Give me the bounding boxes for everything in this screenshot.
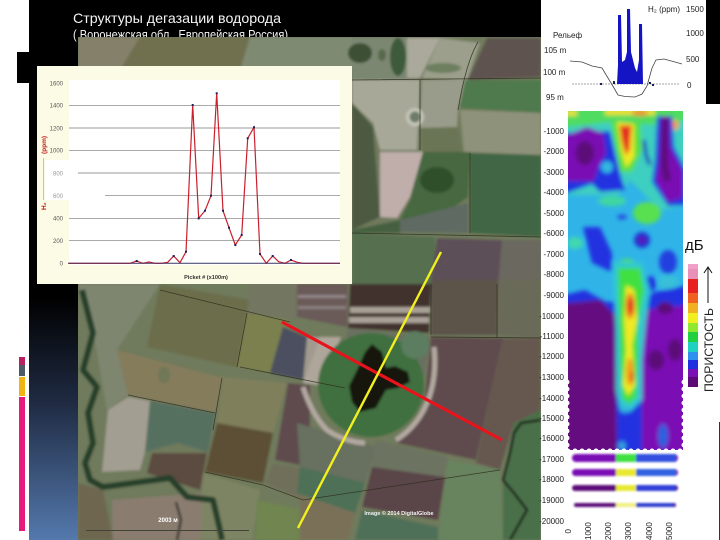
lake green ground: [318, 333, 424, 437]
arrow: porosity up: [704, 267, 712, 303]
chart y axis labels: 800: [53, 172, 64, 178]
elevation labels: [543, 46, 567, 102]
chart y axis title: [41, 136, 48, 210]
panel: relief and hydrogen bars: [541, 0, 706, 104]
middle: [598, 196, 626, 206]
depth axis labels: -15000: [539, 414, 565, 423]
depth axis labels: -2000: [544, 147, 565, 156]
chart x axis title: Picket # (x100m): [184, 275, 228, 281]
depth axis labels: [539, 127, 565, 526]
distance axis labels: 0: [564, 528, 573, 533]
hydrogen axis labels: 0: [687, 81, 692, 90]
distance axis labels: 3000: [624, 522, 633, 540]
relief label: Рельеф: [553, 31, 582, 40]
heatmap: [568, 111, 683, 450]
distance axis labels: 1000: [584, 522, 593, 540]
dark markers: [600, 81, 654, 86]
distance axis labels: 2000: [604, 522, 613, 540]
upper right fields: [352, 38, 407, 80]
depth axis labels: -6000: [544, 229, 565, 238]
depth axis labels: -11000: [540, 332, 565, 341]
upper layers: [568, 111, 683, 130]
depth axis labels: -18000: [539, 475, 565, 484]
satellite map: [76, 35, 546, 540]
upper-left purple: [562, 127, 606, 181]
right plume: [652, 116, 686, 206]
red profile line: [282, 322, 502, 440]
hydrogen axis labels: 1000: [686, 29, 704, 38]
depth axis labels: -7000: [544, 250, 565, 259]
depth axis labels: -8000: [544, 270, 565, 279]
left marker strip: [17, 52, 29, 531]
chart y axis labels: 400: [53, 216, 64, 222]
depth axis labels: -16000: [539, 434, 565, 443]
chart y axis labels: 1200: [50, 126, 64, 132]
depth axis labels: -9000: [544, 291, 565, 300]
elevation labels: 95 m: [546, 93, 564, 102]
chart y axis labels: [50, 82, 64, 268]
yellow profile line: [298, 252, 441, 528]
chart y axis labels: 200: [53, 239, 64, 245]
elevation labels: 100 m: [543, 68, 566, 77]
depth axis labels: -1000: [544, 127, 565, 136]
dark lake: [349, 344, 410, 412]
chart erased patch: [45, 160, 70, 200]
chart y axis title: (ppm): [41, 136, 48, 154]
depth axis labels: -17000: [539, 455, 565, 464]
panel: porosity tomography: [539, 104, 720, 540]
river right: [503, 420, 541, 540]
scalloped depth bands: [572, 454, 678, 507]
depth axis labels: -4000: [544, 188, 565, 197]
title: Структуры дегазации водорода: [73, 10, 281, 26]
top strip fields: [78, 37, 139, 66]
distance axis labels: 4000: [645, 522, 654, 540]
colour scale: [688, 264, 698, 387]
distance axis labels: 5000: [665, 522, 674, 540]
depth axis labels: -5000: [544, 209, 565, 218]
hydrogen axis labels: [648, 5, 704, 90]
chart y axis labels: 1000: [50, 148, 64, 154]
chart y axis labels: 0: [60, 262, 64, 268]
depth axis labels: -13000: [539, 373, 565, 382]
chart y axis labels: 600: [53, 194, 64, 200]
relief profile: [570, 59, 682, 97]
hydrogen axis labels: 1500: [686, 5, 704, 14]
main plume: [612, 262, 650, 412]
lower right fields: [297, 284, 348, 327]
porosity label: ПОРИСТОСТЬ: [702, 308, 716, 392]
chart y axis labels: 1400: [50, 104, 64, 110]
hydrogen axis labels: H₂ (ppm): [648, 5, 680, 14]
left side fields: [78, 284, 160, 410]
upper-left blue: [562, 131, 625, 195]
depth axis labels: -10000: [539, 312, 565, 321]
depth axis labels: -20000: [539, 517, 565, 526]
chart y axis labels: 1600: [50, 82, 64, 88]
right edge line: [719, 422, 720, 540]
dB label: дБ: [685, 237, 704, 254]
subtitle: ( Воронежская обл., Европейская Россия): [73, 28, 288, 42]
blue bars: [617, 9, 643, 84]
distance axis labels: [564, 522, 674, 540]
river left: [82, 290, 222, 540]
depth axis labels: -19000: [539, 496, 565, 505]
elevation labels: 105 m: [544, 46, 567, 55]
pale halo around lake: [396, 347, 435, 440]
hydrogen axis labels: 500: [686, 55, 700, 64]
dotted baseline: [572, 83, 680, 85]
depth axis labels: -3000: [544, 168, 565, 177]
depth axis labels: -14000: [539, 394, 565, 403]
chart gridlines: [69, 105, 340, 263]
chart data markers: [68, 92, 340, 264]
panel: hydrogen line chart: [37, 66, 352, 284]
field boundaries: [128, 42, 541, 500]
chart data line: [68, 93, 340, 263]
lower purple mass: [568, 284, 683, 450]
top plume: [611, 122, 642, 172]
scalloped heatmap edges: [567, 382, 684, 451]
map attribution: Image © 2014 DigitalGlobe: [364, 510, 434, 517]
map scale bar: 2003 м: [158, 518, 178, 524]
thin blue streak: [644, 140, 650, 165]
chart y axis title: H₂: [41, 202, 48, 210]
depth axis labels: -12000: [539, 352, 565, 361]
